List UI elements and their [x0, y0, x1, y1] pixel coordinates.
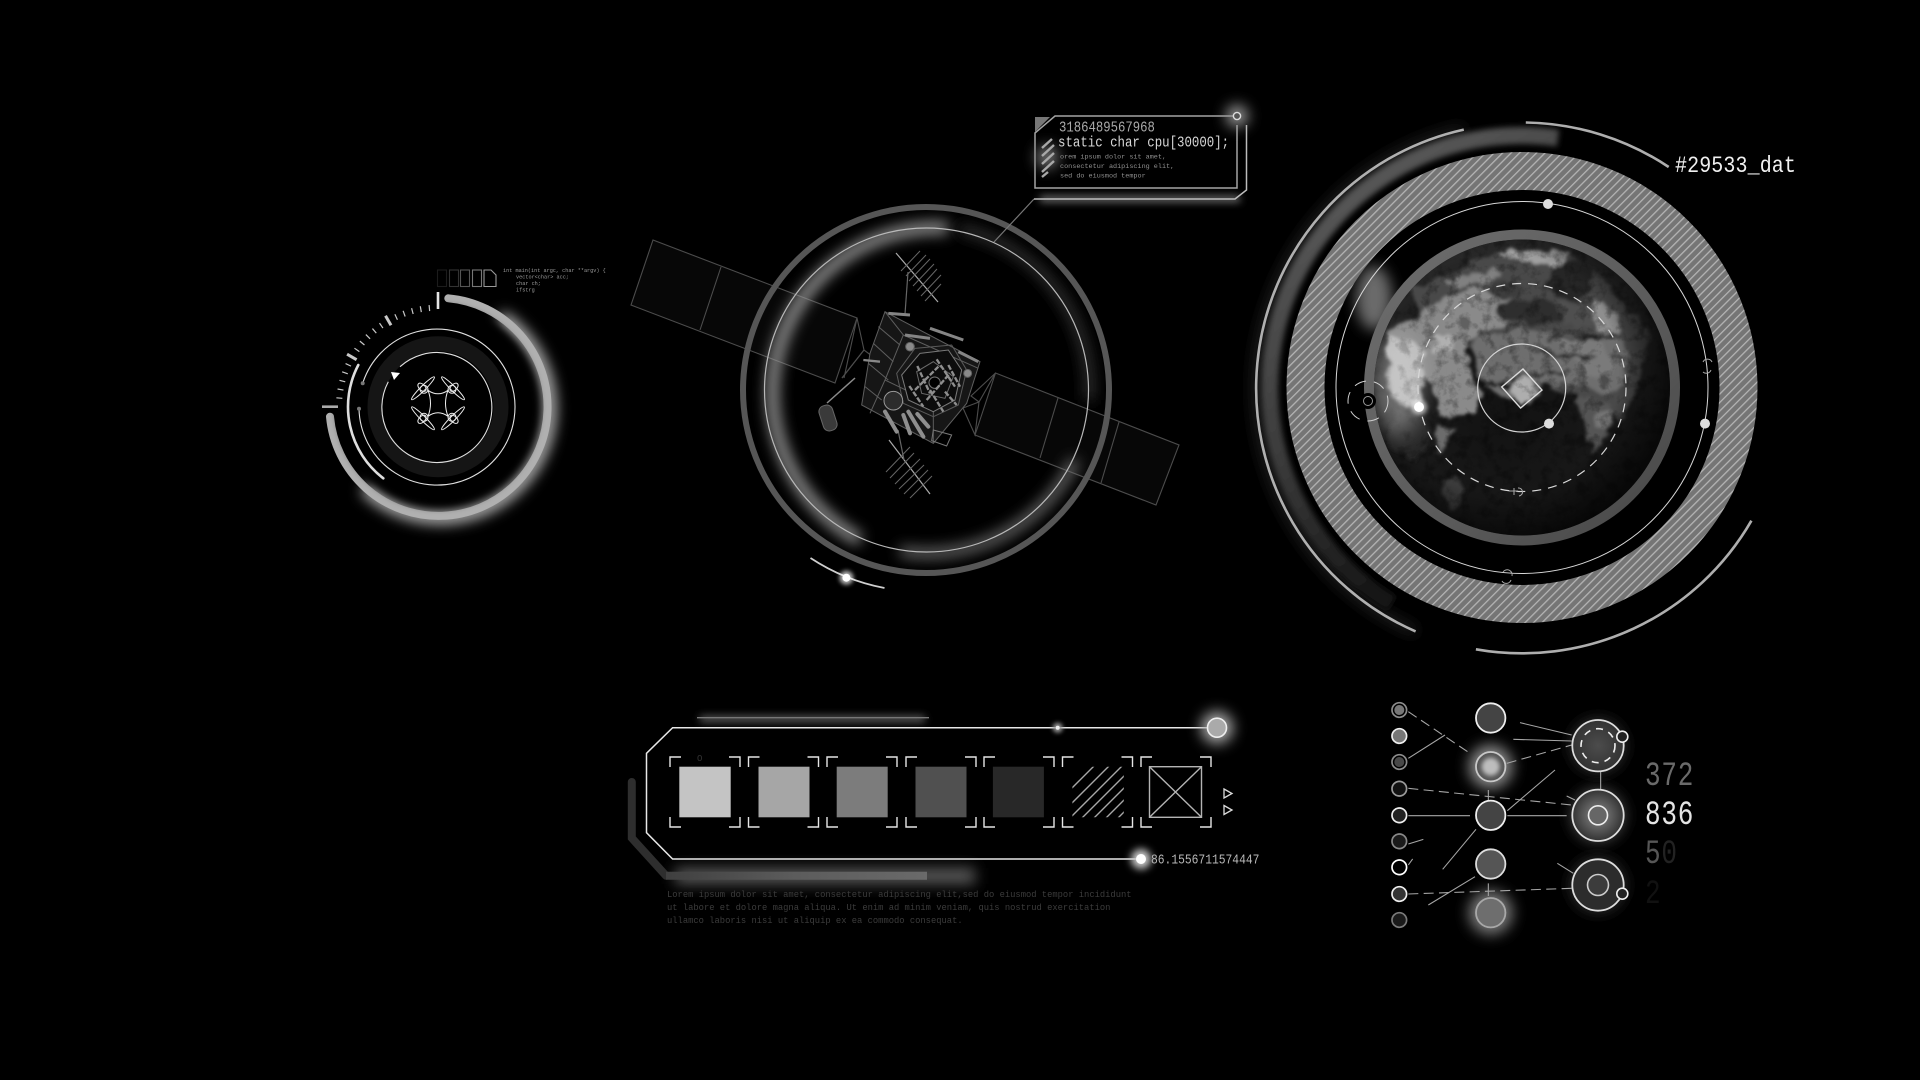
readouts: 2: [1645, 876, 1661, 914]
readouts: 836: [1645, 797, 1694, 835]
code snippet: int main(int argc, char **argv) {: [503, 268, 606, 274]
value: 86.1556711574447: [1151, 853, 1259, 868]
play triangles: [1224, 789, 1232, 814]
swatch 1: [679, 767, 731, 817]
readouts: 372: [1645, 758, 1694, 796]
callout outline: [1035, 116, 1237, 188]
glow band left: [772, 228, 948, 540]
inner scope ring: [764, 228, 1088, 552]
network links: [1408, 712, 1601, 905]
swatch 2: [758, 767, 810, 817]
inner ring: [382, 353, 492, 463]
glow mask inside arc: [338, 307, 538, 507]
callout body: [1060, 154, 1174, 180]
swatch crossed: [1150, 767, 1202, 817]
panel: callout box: [1034, 105, 1248, 199]
small orbit glyphs: [1502, 359, 1712, 583]
glow band right: [960, 229, 1089, 400]
lorem text: ut labore et dolore magna aliqua. Ut enim ad minim veniam, quis nostrud exercitation: [667, 903, 1110, 913]
outer arc left: [1256, 130, 1464, 631]
ring end dots: [357, 381, 365, 411]
globe surface: [1374, 239, 1670, 536]
satellite bus: [862, 312, 980, 446]
backing frame: [632, 782, 975, 876]
callout body: consectetur adipiscing elit,: [1060, 163, 1174, 171]
ocean: [1374, 240, 1640, 524]
glow band bottom right: [900, 460, 1075, 553]
slider dot top: [1053, 723, 1063, 733]
white inner arc: [348, 365, 383, 478]
outer arc bottom right: [1476, 521, 1751, 653]
thin orbit ring: [1336, 202, 1708, 574]
frame outline: [646, 728, 1217, 859]
data tag: #29533_dat: [1675, 154, 1796, 179]
corner triangle: [1035, 117, 1050, 132]
endpoint dot: [1131, 849, 1151, 869]
swatch hatched: [1072, 766, 1124, 818]
boom and sensor: [817, 378, 855, 433]
icon: drone: [410, 375, 466, 431]
callout glow: [1040, 196, 1240, 202]
thick outer arc glow: [365, 317, 549, 517]
callout code line: static char cpu[30000];: [1058, 134, 1229, 152]
lorem text: [667, 890, 1132, 926]
target diamond: [1502, 369, 1542, 408]
swatch brackets: [670, 757, 1211, 827]
outer arc top right: [1526, 122, 1669, 167]
blurred flare near rim: [1356, 266, 1392, 330]
code snippet: char ch;: [516, 281, 541, 287]
outer scope ring: [743, 207, 1109, 573]
lorem text: ullamco laboris nisi ut aliquip ex ea commodo consequat.: [667, 916, 963, 926]
node glows: [1469, 719, 1625, 935]
globe vignette: [1422, 240, 1670, 536]
panel: node network: [1392, 703, 1694, 935]
globe rim: [1369, 234, 1675, 540]
readouts: 50: [1645, 836, 1678, 874]
right hub top: [1572, 720, 1628, 771]
callout id: 3186489567968: [1059, 121, 1155, 137]
panel: satellite scope: [631, 199, 1179, 588]
hatch tag: [1036, 139, 1058, 177]
panel: swatch bar: [632, 712, 1259, 926]
antenna top: [896, 251, 941, 314]
swatch 4: [916, 767, 966, 817]
readouts: [1645, 758, 1694, 914]
dashed orbit: [1418, 284, 1626, 492]
right hub bottom: [1572, 859, 1628, 911]
callout body: orem ipsum dolor sit amet,: [1060, 154, 1166, 162]
tick scale: [322, 292, 438, 407]
endpoint node: [1201, 712, 1233, 744]
dark ring: [375, 344, 501, 470]
hatched ring: [1306, 171, 1738, 604]
antenna bottom: [886, 430, 932, 498]
swatch 5: [993, 767, 1044, 817]
swatch 3: [837, 767, 888, 817]
middle nodes: [1476, 703, 1505, 927]
data blocks: [438, 270, 496, 286]
thin ring: [359, 329, 515, 485]
panel: globe scanner: [1256, 122, 1796, 653]
side marker: [1348, 381, 1388, 421]
continents: [1387, 250, 1650, 507]
target circle: [1478, 344, 1566, 432]
orbit marker dot: [839, 571, 853, 585]
pointer triangle: [391, 372, 400, 380]
left side brightening: [1374, 335, 1422, 435]
code snippet: vector<char> acc;: [516, 274, 569, 280]
panel: drone radar dial: [322, 268, 606, 517]
status dot: [1226, 105, 1248, 127]
lorem text: Lorem ipsum dolor sit amet, consectetur adipiscing elit,sed do eiusmod tempor incididunt: [667, 890, 1132, 900]
terrain mottling: [1383, 240, 1646, 502]
solar panel right: [963, 373, 1179, 505]
orbit dots: [1411, 199, 1710, 429]
code snippet: [503, 268, 606, 294]
connector to callout: [994, 199, 1034, 242]
small label: O: [697, 754, 702, 764]
callout outer frame: [1034, 125, 1246, 199]
top streak: [697, 718, 929, 719]
callout body: sed do eiusmod tempor: [1060, 172, 1146, 180]
solar panel left: [631, 240, 880, 383]
orbit marker arc: [810, 558, 884, 588]
gradient band around hatch ring: [1270, 135, 1558, 604]
right hub middle: [1572, 790, 1624, 841]
thick outer arc: [330, 298, 548, 516]
left nodes: [1392, 703, 1407, 927]
code snippet: ifstrg: [516, 288, 535, 294]
soft halo outside arc: [1256, 130, 1464, 631]
